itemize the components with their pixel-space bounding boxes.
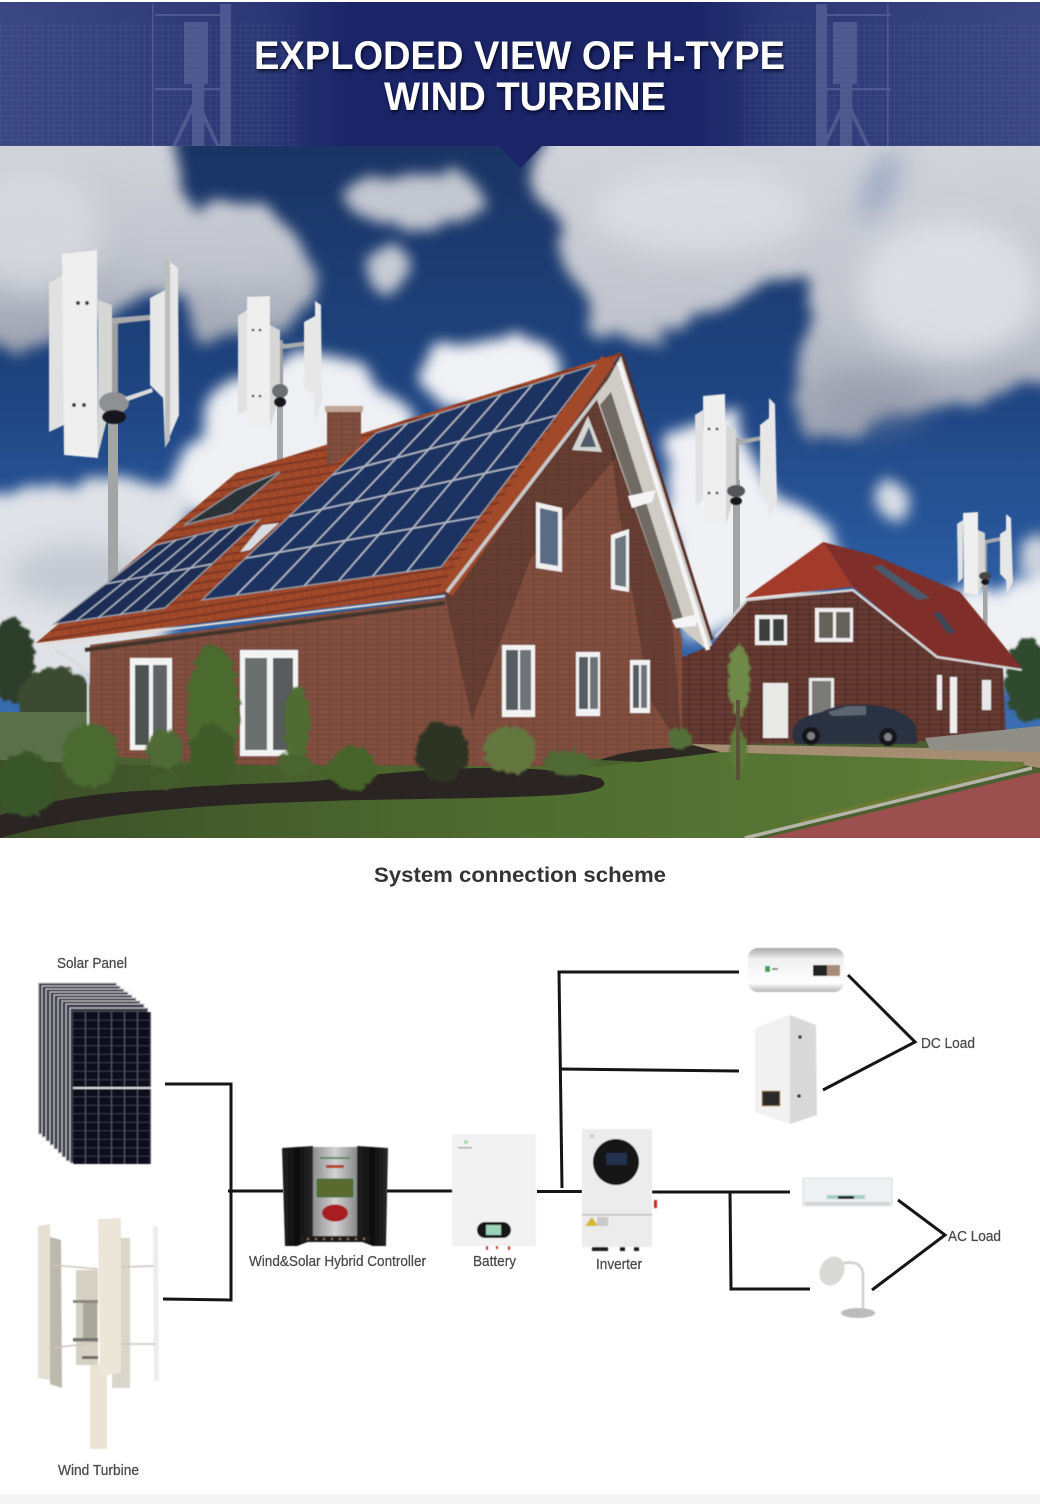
front panel — [73, 1012, 151, 1164]
neighbour roof — [745, 542, 853, 598]
flower border — [800, 764, 1024, 822]
shrubs and trees — [0, 644, 750, 817]
gable windows — [502, 502, 650, 717]
hybrid controller — [282, 1146, 388, 1246]
turbine poles behind the roof — [108, 390, 988, 640]
turbine 3 — [695, 394, 777, 525]
ghost turbine left — [152, 4, 231, 146]
connection wires — [163, 972, 945, 1300]
dormer glass — [240, 523, 279, 552]
front wall — [90, 598, 445, 778]
title — [254, 34, 785, 119]
solar panel — [38, 983, 151, 1164]
brackets — [628, 490, 656, 508]
label: battery: Battery — [473, 1254, 517, 1270]
ground — [0, 726, 1040, 838]
neighbour windows — [755, 615, 787, 645]
small solar array — [54, 520, 259, 624]
wall boiler — [755, 1015, 817, 1124]
inverter — [582, 1129, 657, 1251]
label: controller: Wind&Solar Hybrid Controller — [249, 1254, 426, 1270]
turbine arms — [52, 1265, 155, 1348]
title: WIND TURBINE — [384, 75, 666, 119]
ghost turbine right — [816, 4, 891, 146]
desk lamp — [815, 1252, 875, 1318]
label: inverter: Inverter — [596, 1257, 642, 1273]
footer strip — [0, 1494, 1040, 1504]
gable wall — [445, 354, 682, 778]
gutter — [38, 596, 445, 645]
sky — [0, 146, 1040, 746]
neighbour skylights — [873, 565, 930, 600]
turbine 4 — [957, 512, 1013, 595]
wind turbine product — [38, 1218, 159, 1449]
lawn — [0, 752, 1025, 838]
neighbour house — [680, 542, 1022, 746]
mulch bed — [0, 768, 604, 838]
air conditioner — [803, 1178, 892, 1206]
water heater — [748, 948, 844, 992]
cloud shading — [0, 147, 1040, 605]
main house — [36, 352, 712, 778]
turbine core — [76, 1270, 98, 1365]
attic window — [572, 416, 602, 452]
title: EXPLODED VIEW OF H-TYPE — [254, 34, 785, 78]
label: ac load: AC Load — [948, 1229, 1001, 1245]
label: wind turbine: Wind Turbine — [58, 1463, 139, 1479]
header banner — [0, 2, 1040, 168]
low wall between houses — [710, 744, 750, 745]
front doors — [130, 650, 298, 756]
panel stack — [38, 983, 148, 1163]
chimney — [325, 406, 363, 465]
roof window collector — [184, 472, 280, 525]
car — [792, 705, 917, 746]
sapling trunk — [736, 700, 740, 780]
background trees left — [0, 618, 1040, 732]
shadow on gable wall — [445, 354, 622, 720]
white bargeboard — [597, 354, 712, 650]
ground base — [113, 740, 1040, 838]
banner pointer — [499, 146, 542, 168]
clouds — [0, 120, 1040, 690]
driveway — [690, 744, 1040, 768]
neighbour wall — [680, 590, 1006, 745]
section heading: System connection scheme — [374, 863, 666, 887]
main roof — [36, 352, 622, 643]
banner background — [0, 2, 1040, 146]
label: solar panel: Solar Panel — [57, 956, 127, 972]
battery — [452, 1134, 536, 1250]
road — [765, 772, 1040, 838]
label: dc load: DC Load — [921, 1036, 975, 1052]
large solar array — [202, 365, 595, 600]
turbine 2 — [238, 296, 322, 429]
photo: house with solar panels and wind turbines — [0, 120, 1040, 838]
verge — [446, 360, 608, 592]
turbines in the photo — [49, 250, 1013, 595]
turbine 1 — [49, 250, 179, 458]
